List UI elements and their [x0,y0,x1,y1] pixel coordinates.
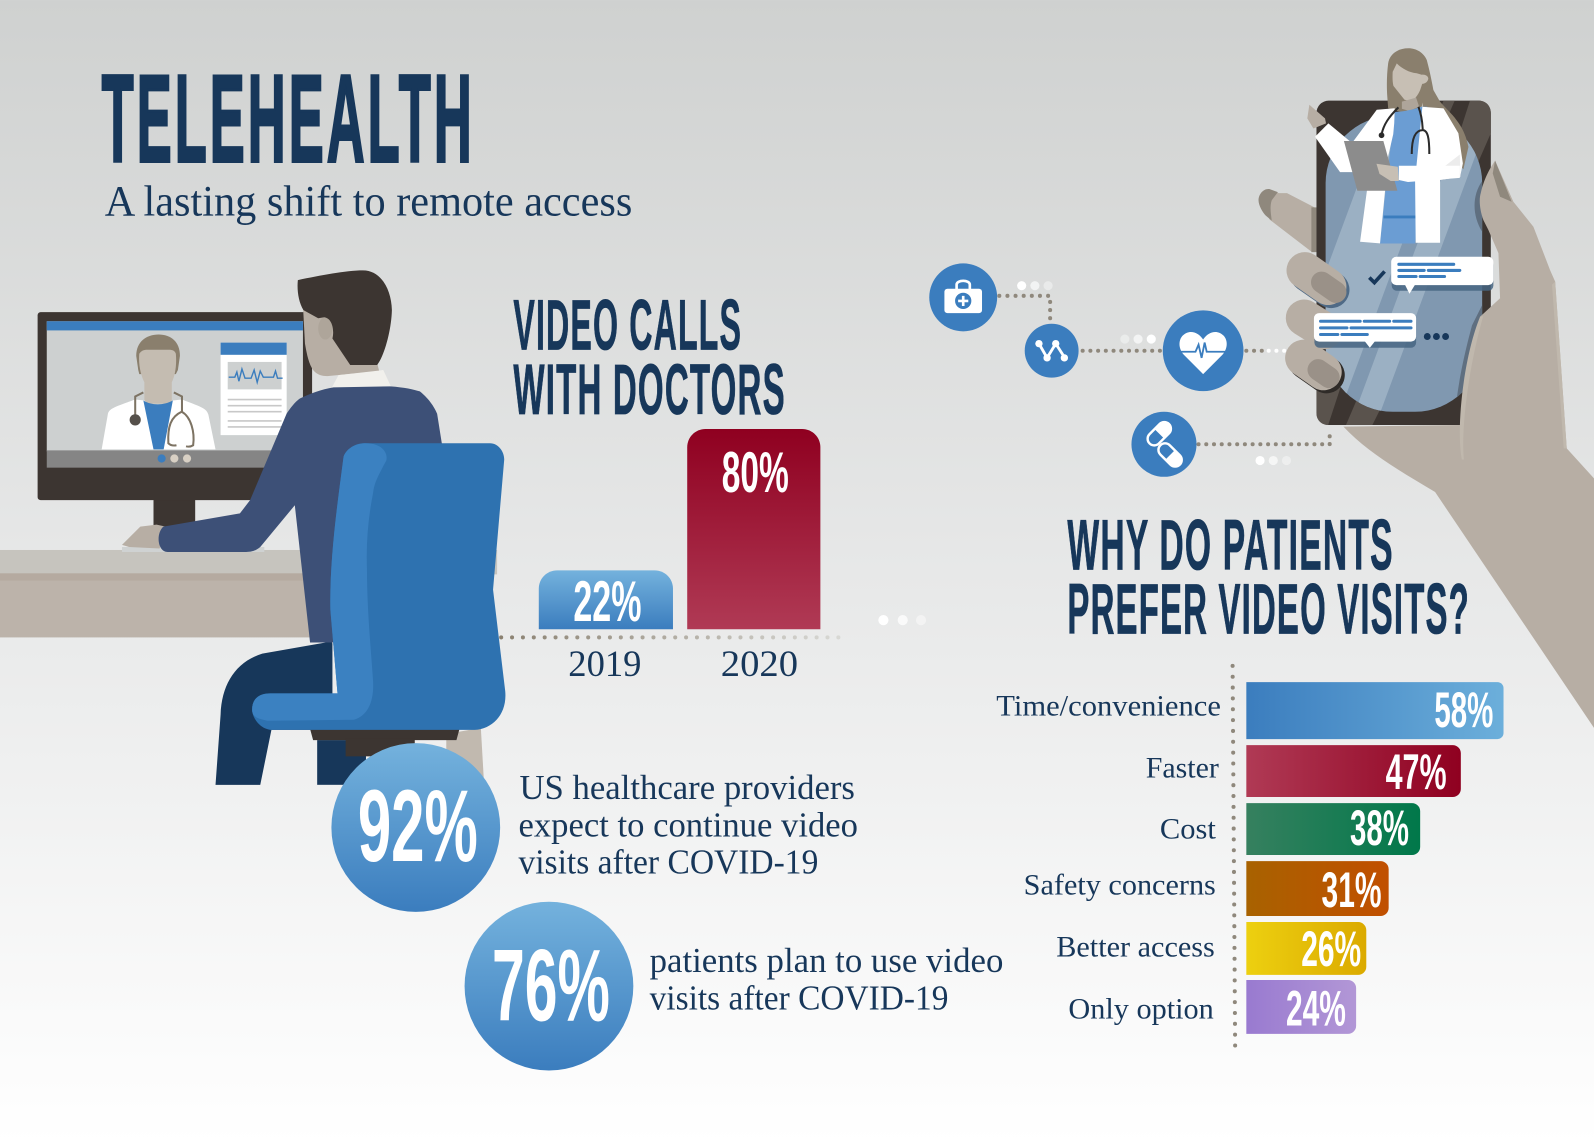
section heading: video calls [513,287,786,430]
bar 2020 [687,429,820,629]
bar: cost [1160,800,1420,856]
bar: safety concerns: 31% [1322,862,1382,918]
bar 2019 [539,570,673,634]
year labels [568,643,798,684]
illustration: hand holding phone [1259,48,1594,728]
icon: heart with pulse [1163,310,1243,391]
bar: time/convenience: 58% [1434,682,1493,738]
stat: 92%: US healthcare providers [519,768,855,807]
stat: 76%: 76% [492,929,610,1043]
bar: cost: 38% [1350,800,1409,856]
bar chart: video calls by year [501,429,840,684]
chart page on screen [221,343,287,435]
stat: 92% [331,743,858,912]
bar: cost: Cost [1160,813,1217,846]
section heading: video calls: VIDEO CALLS [513,287,742,366]
bar 2019: 22% [573,570,641,634]
stat: 92%: expect to continue video [518,806,858,845]
icon: network line [1025,324,1079,378]
bar: better access [1056,921,1366,977]
stat: 76%: visits after COVID-19 [650,978,948,1017]
bar: faster: 47% [1386,744,1447,800]
man collar [331,370,391,388]
doctor coat [1352,102,1463,243]
bar: safety concerns: Safety concerns [1024,869,1216,902]
desk [0,550,497,637]
hand palm and thumb [1343,161,1594,728]
stat: 92%: 92% [358,769,478,883]
typing dots [1424,333,1449,340]
bar: better access: 26% [1301,921,1361,977]
doctor hair [1387,48,1468,169]
top finger [1259,189,1316,252]
check mark [1369,271,1385,283]
man legs [216,641,366,785]
doctor scrubs [1380,107,1427,243]
chair base [310,728,484,781]
bar: better access: Better access [1056,931,1215,964]
stat: 76%: patients plan to use video [650,941,1003,980]
monitor [38,312,312,531]
bar: only option: 24% [1286,981,1346,1037]
bar: only option [1068,980,1356,1037]
chat bubble 1 [1391,257,1493,294]
bar chart: reasons [996,666,1504,1048]
doctor raised arm [1307,105,1357,172]
section heading: why do patients [1067,506,1470,649]
bar: faster [1146,744,1461,800]
man sweater [159,386,478,642]
stat: 92%: visits after COVID-19 [518,842,818,881]
icon: medical kit [929,263,997,331]
connectors [999,281,1330,465]
doctor on screen [102,334,216,449]
clipboard [1344,141,1397,191]
man neck and face [303,305,379,376]
text: WITH DOCTORS [513,351,786,430]
bar: safety concerns [1024,861,1389,918]
icon: pills [1131,412,1197,477]
bar: time/convenience [996,682,1504,739]
illustration: man at desk on video call [0,270,505,785]
chat bubble 2 [1314,313,1416,348]
doctor lower hand and sleeve [1376,164,1460,182]
man hand [122,525,166,548]
bar: time/convenience: Time/convenience [996,690,1221,723]
bar 2020: 80% [722,441,789,505]
man mouse [122,547,264,552]
office chair [252,443,505,730]
year labels: 2019 [568,643,641,684]
bar: faster: Faster [1146,752,1219,785]
text: TELEHEALTH [102,51,475,189]
year labels: 2020 [721,643,798,684]
man hair [298,270,392,365]
phone body [1316,100,1491,425]
bar: only option: Only option [1068,993,1214,1026]
doctor in phone [1307,48,1468,243]
lower fingers [1278,245,1357,401]
subtitle: A lasting shift to remote access [105,178,632,226]
stethoscope [1382,107,1429,154]
stat: 76% [465,902,1003,1070]
